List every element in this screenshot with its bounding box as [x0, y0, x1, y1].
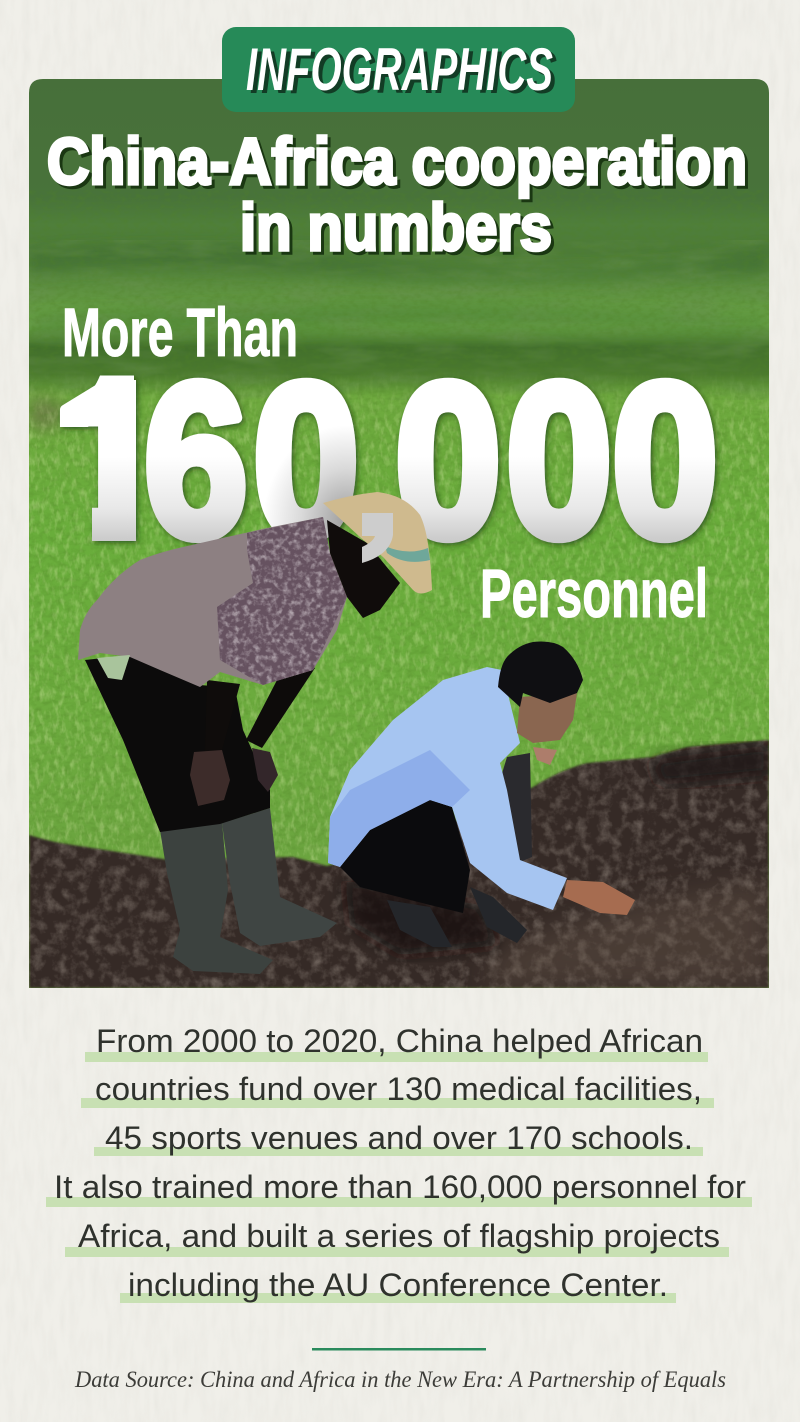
badge label: INFOGRAPHICS — [246, 36, 553, 103]
paragraph: countries fund over 130 medical facilities, — [95, 1071, 702, 1107]
big number: 160 000: 0 — [395, 340, 501, 582]
title: in numbers — [240, 190, 552, 264]
big number: 160 000: 0 — [612, 340, 718, 582]
big number: 160 000: 1 — [50, 338, 179, 582]
expert trousers — [340, 798, 470, 913]
expert head — [517, 693, 577, 743]
person: Chinese expert — [328, 642, 635, 947]
farmer trousers — [85, 655, 270, 832]
big number: 160 000 — [58, 374, 720, 549]
farmer hands — [190, 750, 230, 806]
farmer head — [327, 520, 400, 618]
data source: Data Source: China and Africa in the New Era: A Partnership of Equals — [74, 1367, 726, 1392]
farmer shirt — [78, 517, 347, 687]
title — [47, 124, 750, 267]
hat band — [385, 546, 430, 562]
shirt pocket tag — [97, 655, 130, 680]
big number: 160 000: 0 — [506, 340, 612, 582]
expert hands — [533, 747, 557, 765]
body text with highlights — [46, 1023, 752, 1303]
paragraph: Africa, and built a series of flagship projects — [78, 1218, 720, 1254]
big number: 160 000: 6 — [144, 338, 248, 582]
expert shirt — [328, 667, 567, 910]
shirt print — [217, 517, 347, 685]
paragraph: including the AU Conference Center. — [128, 1267, 668, 1303]
expert lower leg — [502, 753, 532, 861]
straw hat — [323, 492, 432, 594]
big number comma — [362, 513, 393, 563]
paragraph — [54, 1023, 746, 1303]
panel: field photo — [29, 79, 777, 988]
badge label: INFOGRAPHICS — [250, 39, 557, 106]
paragraph: From 2000 to 2020, China helped African — [96, 1023, 703, 1059]
left boot — [160, 822, 273, 974]
label: More Than: More Than — [62, 294, 298, 371]
person: local farmer — [78, 492, 432, 974]
farmer arms — [206, 680, 240, 696]
grass bands — [29, 249, 777, 432]
paragraph: 45 sports venues and over 170 schools. — [105, 1120, 693, 1156]
title: in numbers — [243, 193, 555, 267]
expert shoes — [387, 900, 452, 947]
badge — [222, 27, 575, 112]
soil — [29, 740, 769, 988]
badge label — [246, 36, 557, 106]
paragraph: It also trained more than 160,000 personnel for — [54, 1169, 746, 1205]
big number: 160 000: 0 — [253, 340, 359, 582]
